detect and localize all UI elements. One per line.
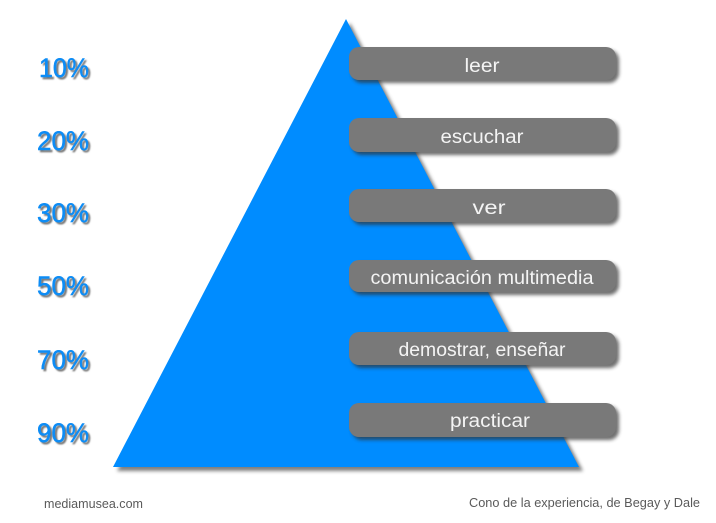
- percentages: [37, 53, 91, 450]
- bar: comunicación multimedia: comunicación multimedia: [370, 268, 594, 289]
- 10%: 10%: [41, 55, 91, 85]
- bar: demostrar, enseñar: [349, 332, 619, 368]
- 20%: 20%: [37, 126, 89, 156]
- bar: demostrar, enseñar: demostrar, enseñar: [398, 340, 566, 361]
- bar: ver: [349, 189, 619, 225]
- 50%: 50%: [39, 273, 91, 303]
- 10%: 10%: [39, 53, 89, 83]
- footer: source site: mediamusea.com: [44, 496, 143, 511]
- 70%: 70%: [37, 345, 89, 375]
- 70%: 70%: [39, 347, 91, 377]
- 50%: 50%: [37, 271, 89, 301]
- bar: ver: ver: [472, 198, 506, 219]
- pyramid: [113, 19, 583, 471]
- 90%: 90%: [37, 418, 89, 448]
- footer: credit: Cono de la experiencia, de Begay y Dale: [469, 495, 700, 510]
- 30%: 30%: [37, 198, 89, 228]
- bar: leer: [349, 47, 619, 83]
- 20%: 20%: [39, 128, 91, 158]
- bar: leer: leer: [464, 56, 500, 77]
- bar: comunicación multimedia: [349, 260, 619, 295]
- 30%: 30%: [39, 200, 91, 230]
- bar: practicar: [349, 403, 619, 440]
- 90%: 90%: [39, 420, 91, 450]
- bar: escuchar: escuchar: [440, 127, 524, 148]
- bar: escuchar: [349, 118, 619, 155]
- bar: practicar: practicar: [450, 411, 531, 432]
